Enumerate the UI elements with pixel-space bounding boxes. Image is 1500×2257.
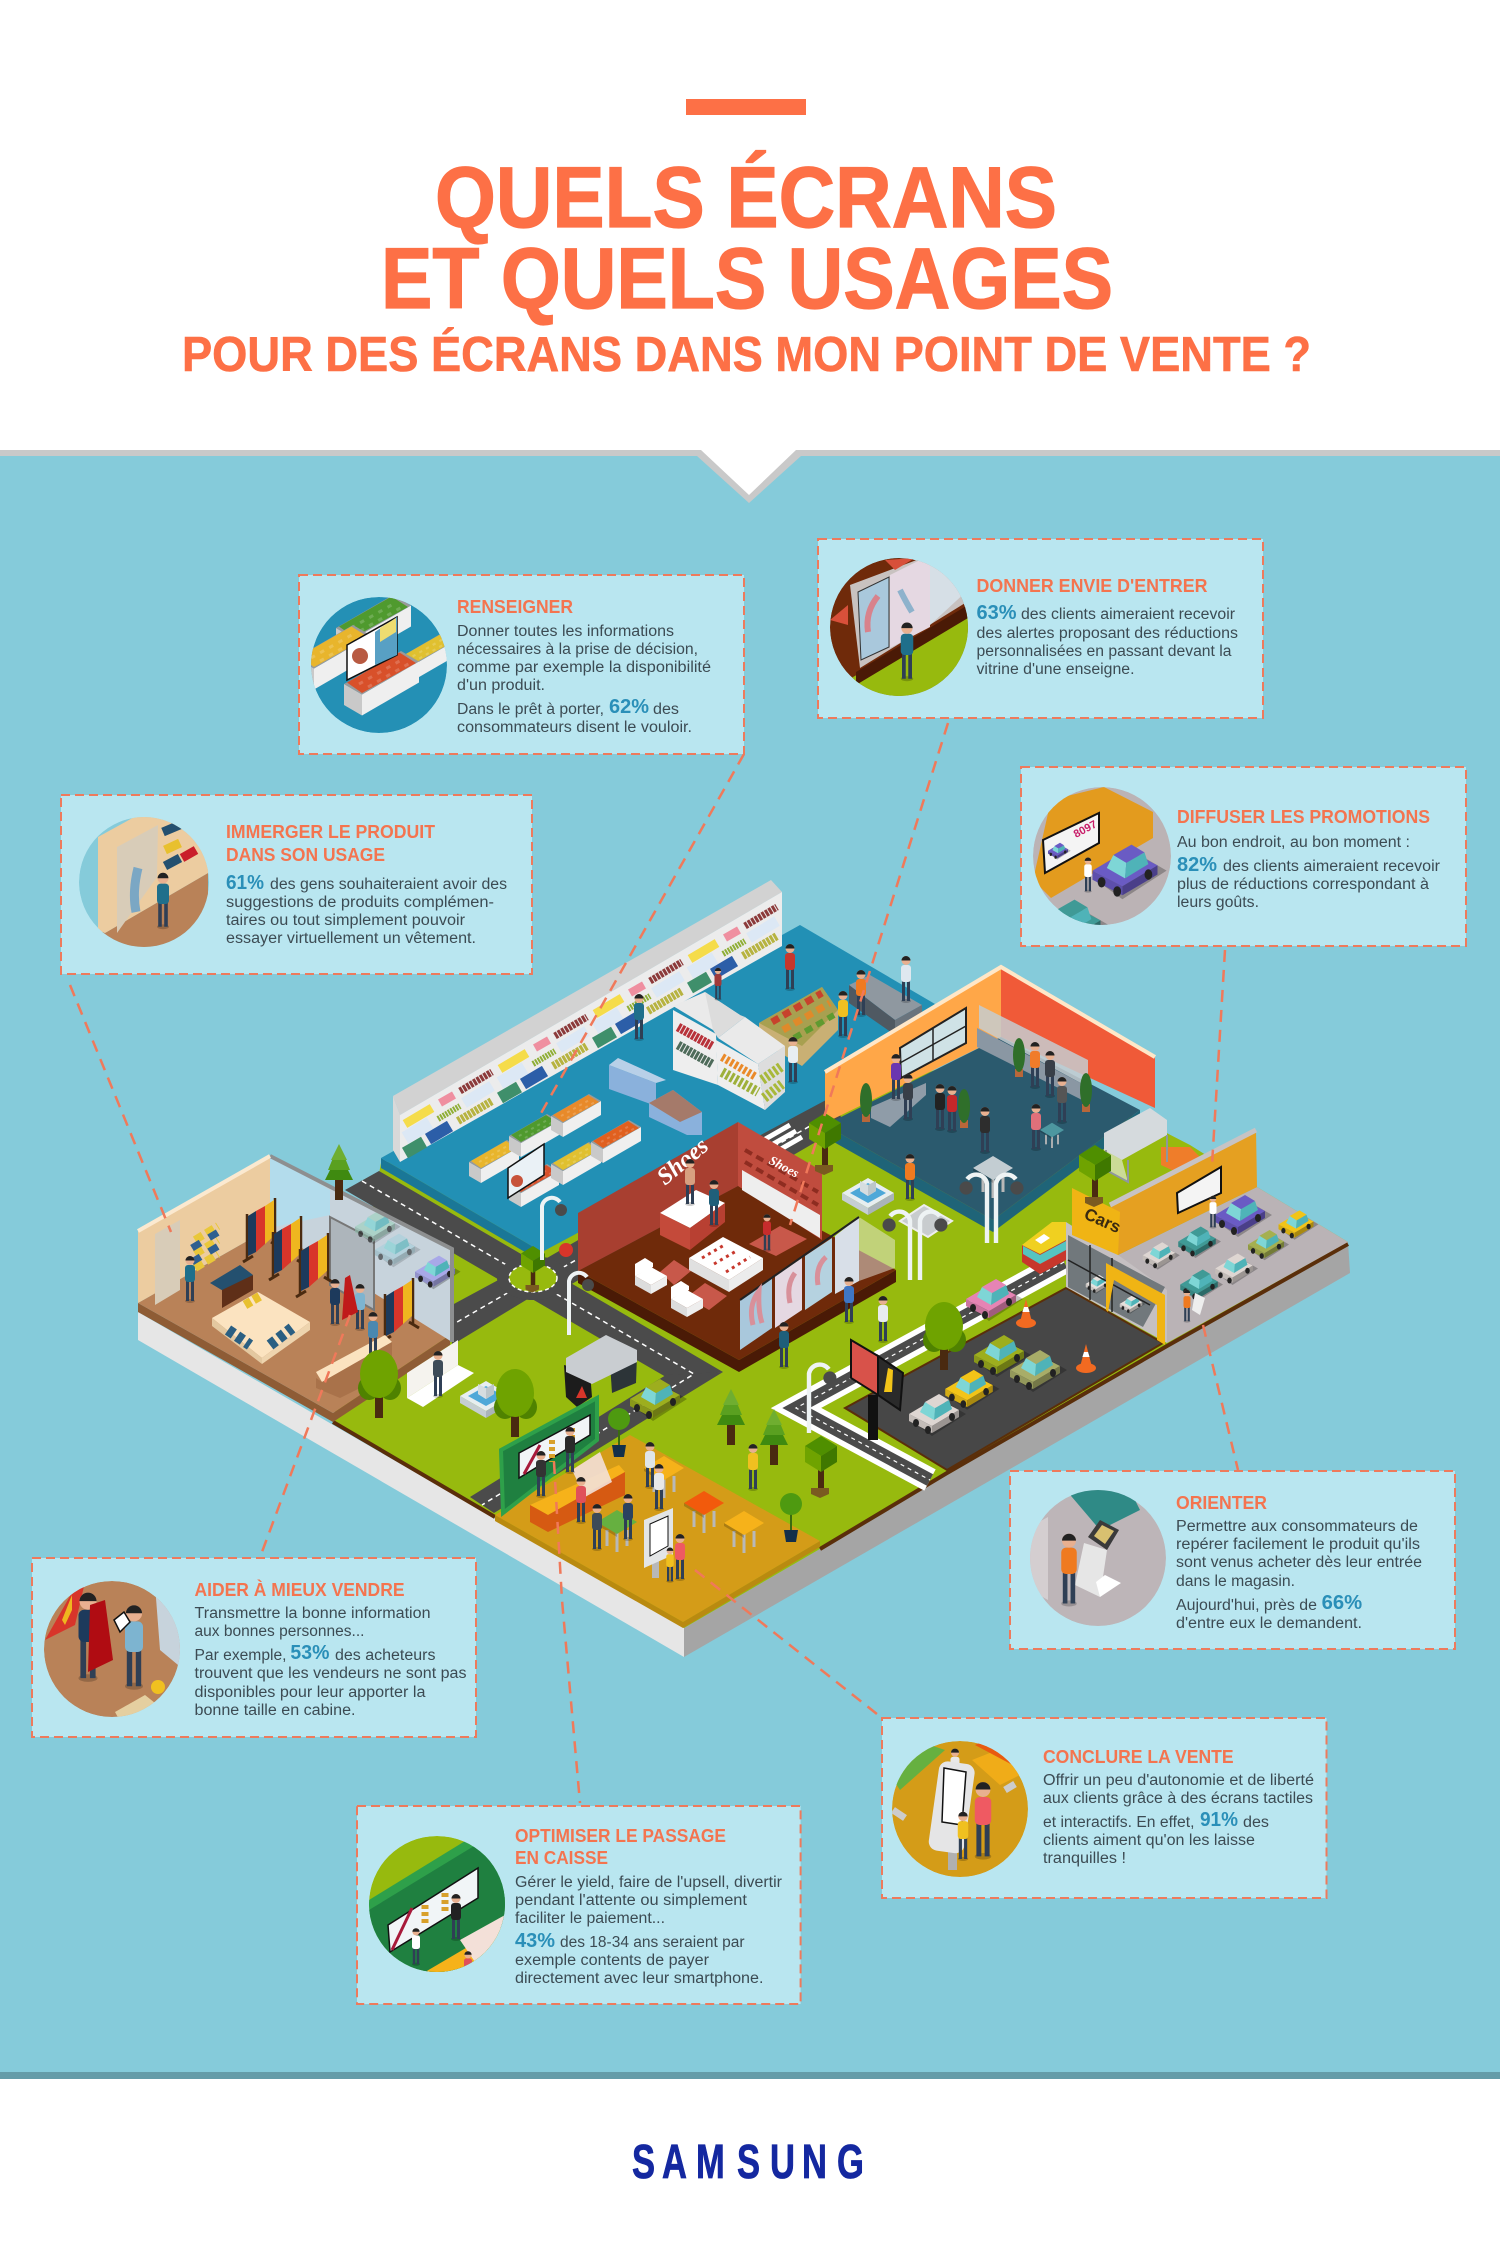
body text: clients aiment qu'on les laisse: [1043, 1832, 1255, 1849]
body text: leurs goûts.: [1177, 894, 1259, 911]
body text: Aujourd'hui, près de: [1176, 1597, 1317, 1614]
heading: OPTIMISER LE PASSAGE: [515, 1825, 726, 1846]
body text: Gérer le yield, faire de l'upsell, divertir: [515, 1874, 782, 1891]
body text: [1177, 834, 1440, 911]
supermarket shoppers: [634, 944, 911, 1084]
produce bins with screen: [469, 1094, 641, 1207]
body text: des alertes proposant des réductions: [976, 625, 1238, 642]
panel: donner envie d'entrer: [818, 539, 1263, 718]
clothing store: [138, 1156, 461, 1422]
body text: 66%: [1322, 1592, 1362, 1614]
panel: renseigner: [296, 575, 744, 754]
body text: [515, 1874, 782, 1987]
body text: [976, 602, 1238, 678]
body text: 62%: [609, 696, 649, 718]
body text: et interactifs. En effet,: [1043, 1814, 1194, 1831]
fruit stand and checkout: [759, 975, 922, 1066]
bank building: [825, 967, 1155, 1232]
body text: 63%: [976, 602, 1017, 624]
body text: d'un produit.: [457, 677, 545, 694]
heading: DONNER ENVIE D'ENTRER: [976, 575, 1208, 596]
park: trees, lamps, fountains, bench, shelter: [358, 1113, 1111, 1498]
isometric store scene: [138, 880, 1350, 1657]
billboard: [851, 1340, 903, 1440]
body text: aux bonnes personnes...: [194, 1623, 364, 1640]
accent bar: [686, 99, 806, 115]
header: white area with arrow notch: [0, 0, 1500, 503]
roundabout props: lamps, sign, tree: [325, 1144, 594, 1335]
body text: Permettre aux consommateurs de: [1176, 1518, 1418, 1535]
panel: orienter: [1010, 1471, 1455, 1649]
body text: consommateurs disent le vouloir.: [457, 719, 692, 736]
body text: [1176, 1518, 1422, 1632]
supermarket wall shelf: [393, 880, 782, 1162]
body text: suggestions de produits complémen-: [226, 894, 494, 911]
panel: optimiser le passage en caisse: [357, 1806, 801, 2004]
platform base: [138, 1048, 1350, 1657]
title: [182, 150, 1311, 382]
body text: Par exemple,: [194, 1647, 286, 1664]
car dealership: Cars: [1081, 1204, 1124, 1237]
gondola shelves: [673, 992, 785, 1110]
heading: DIFFUSER LES PROMOTIONS: [1177, 806, 1430, 827]
body text: d'entre eux le demandent.: [1176, 1615, 1362, 1632]
connector lines: [70, 723, 1238, 1803]
street vehicles: [909, 1222, 1096, 1436]
icon: produce bins with screen: [311, 597, 447, 733]
body text: plus de réductions correspondant à: [1177, 876, 1429, 893]
body text: disponibles pour leur apporter la: [194, 1684, 426, 1701]
body text: [194, 1605, 467, 1719]
icon: sales assistant with tablet: [44, 1581, 180, 1717]
logo: Samsung: SAMSUNG: [632, 2134, 864, 2188]
shoe store: [578, 1122, 896, 1372]
icon: promo screen on wall: 8097: [1072, 819, 1099, 841]
body text: taires ou tout simplement pouvoir: [226, 912, 465, 929]
roads: [345, 1095, 845, 1513]
body text: des acheteurs: [335, 1647, 436, 1664]
body text: des gens souhaiteraient avoir des: [270, 876, 507, 893]
heading: [226, 821, 436, 865]
icon: wayfinding kiosk: [1030, 1490, 1166, 1626]
body text: des: [1243, 1814, 1269, 1831]
heading: IMMERGER LE PRODUIT: [226, 821, 436, 842]
body text: Dans le prêt à porter,: [457, 701, 604, 718]
car dealership: [1066, 1130, 1348, 1345]
body text: bonne taille en cabine.: [194, 1702, 356, 1719]
body text: repérer facilement le produit qu'ils: [1176, 1536, 1420, 1553]
body text: 53%: [290, 1642, 330, 1664]
body text: [457, 623, 711, 736]
body text: des 18-34 ans seraient par: [560, 1934, 744, 1951]
bus shelter and bench behind dealership: [1104, 1108, 1201, 1182]
body text: 61%: [226, 872, 264, 894]
body text: vitrine d'une enseigne.: [976, 661, 1134, 678]
body text: directement avec leur smartphone.: [515, 1970, 764, 1987]
title: QUELS ÉCRANS: [435, 150, 1057, 246]
body text: 91%: [1200, 1809, 1238, 1831]
body text: 82%: [1177, 854, 1217, 876]
heading: CONCLURE LA VENTE: [1043, 1746, 1234, 1767]
body text: comme par exemple la disponibilité: [457, 659, 711, 676]
title: POUR DES ÉCRANS DANS MON POINT DE VENTE ?: [182, 328, 1311, 382]
body text: aux clients grâce à des écrans tactiles: [1043, 1790, 1313, 1807]
heading: ORIENTER: [1176, 1492, 1267, 1513]
panel: diffuser les promotions: [1021, 767, 1466, 954]
body text: personnalisées en passant devant la: [976, 643, 1232, 660]
panel: aider a mieux vendre: [32, 1558, 476, 1737]
body text: sont venus acheter dès leur entrée: [1176, 1554, 1422, 1571]
body text: Donner toutes les informations: [457, 623, 674, 640]
body text: faciliter le paiement...: [515, 1910, 665, 1927]
coolers: [609, 1058, 702, 1135]
body text: des clients aimeraient recevoir: [1021, 606, 1235, 623]
body text: [1043, 1772, 1314, 1867]
body text: trouvent que les vendeurs ne sont pas: [194, 1665, 467, 1682]
heading: EN CAISSE: [515, 1847, 608, 1868]
heading: DANS SON USAGE: [226, 844, 385, 865]
body text: pendant l'attente ou simplement: [515, 1892, 748, 1909]
shoe store: Shoes: [652, 1133, 714, 1191]
heading: AIDER À MIEUX VENDRE: [194, 1579, 404, 1600]
icon: virtual mirror: [79, 815, 210, 950]
road with white borders: [796, 1262, 1064, 1480]
body text: des clients aimeraient recevoir: [1223, 858, 1440, 875]
body text: Au bon endroit, au bon moment :: [1177, 834, 1410, 851]
heading: RENSEIGNER: [457, 596, 573, 617]
parking lot asphalt: [845, 1288, 1163, 1470]
body text: tranquilles !: [1043, 1850, 1126, 1867]
shoe store: Shoes: [767, 1152, 802, 1181]
panel: immerger le produit: [61, 795, 532, 974]
body text: nécessaires à la prise de décision,: [457, 641, 698, 658]
title: ET QUELS USAGES: [381, 231, 1113, 327]
body text: exemple contents de payer: [515, 1952, 709, 1969]
body text: Offrir un peu d'autonomie et de liberté: [1043, 1772, 1314, 1789]
body text: Transmettre la bonne information: [194, 1605, 430, 1622]
body text: 43%: [515, 1930, 555, 1952]
body text: des: [653, 701, 679, 718]
body text: dans le magasin.: [1176, 1573, 1295, 1590]
panel: conclure la vente: [882, 1718, 1326, 1898]
supermarket floor: [381, 925, 935, 1262]
icon: promo screen on wall: [1033, 787, 1171, 925]
heading: [515, 1825, 726, 1868]
background: teal area: [0, 450, 1500, 2075]
footer band and white footer: [0, 2072, 1500, 2257]
icon: touch kiosk: [892, 1741, 1028, 1877]
body text: essayer virtuellement un vêtement.: [226, 930, 476, 947]
icon: menu boards: [369, 1836, 505, 1972]
fast-food restaurant: [495, 1398, 820, 1628]
body text: [226, 872, 507, 947]
icon: shoe shop window: [830, 558, 968, 696]
